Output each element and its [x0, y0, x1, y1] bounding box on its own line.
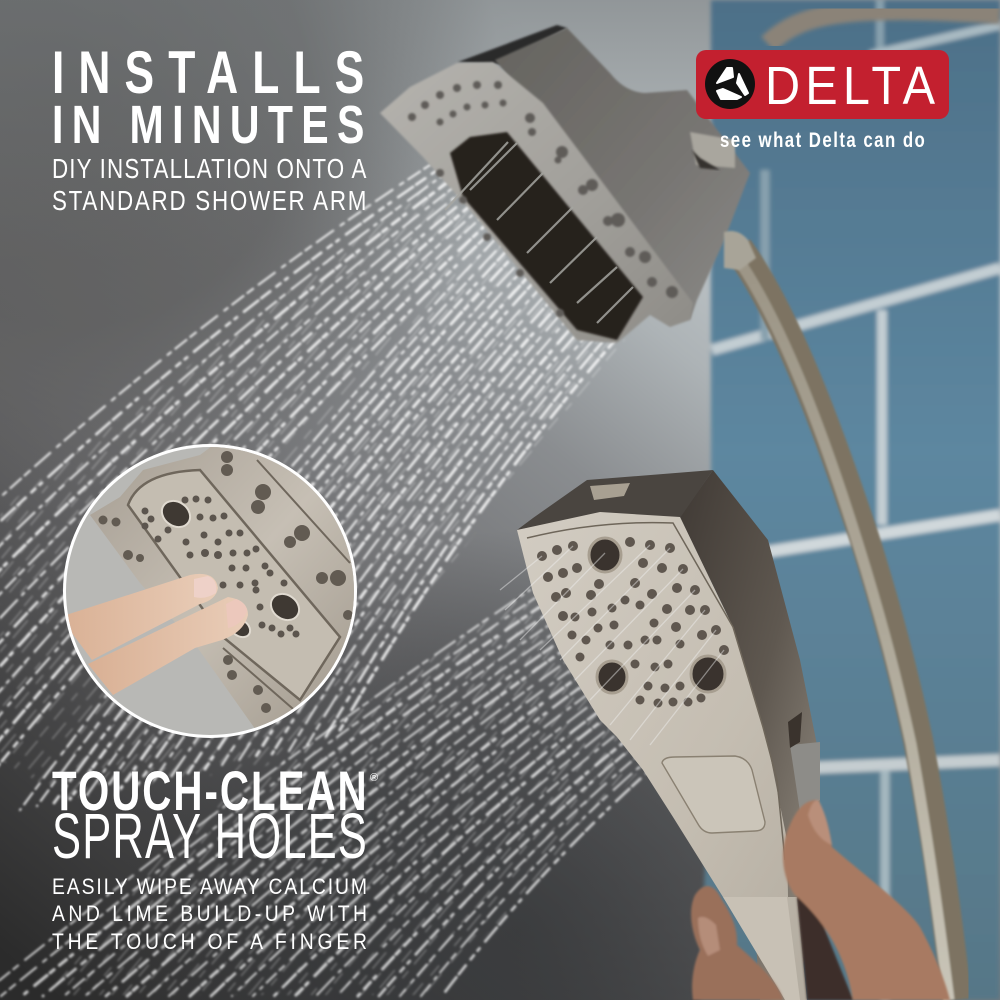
hand shower top button	[590, 483, 630, 500]
head back body	[495, 28, 750, 320]
hand shower inner edge	[527, 523, 785, 860]
inset: nails	[194, 576, 216, 598]
hand holding shower	[691, 800, 950, 1000]
overhead shower head	[380, 25, 756, 343]
headline: touch-clean spray holes: ®	[370, 772, 378, 784]
fingers	[691, 886, 783, 1000]
logo tagline: see what Delta can do	[720, 129, 925, 153]
hand shower water jets	[500, 545, 724, 745]
inset: metal panel	[90, 440, 360, 740]
headline: installs in minutes: STANDARD SHOWER ARM	[52, 186, 366, 217]
shower arm	[768, 10, 1000, 44]
head connector collar	[724, 231, 756, 270]
palm shadow	[797, 897, 853, 1000]
head water jets	[445, 142, 633, 323]
hand shower silver lower side	[790, 742, 820, 812]
headline: touch-clean spray holes: AND LIME BUILD-UP WITH	[52, 902, 367, 926]
inset: edge grooves	[223, 460, 350, 715]
inset: side nozzle clusters	[98, 451, 353, 713]
logo emblem	[705, 59, 755, 109]
thumb nail	[808, 800, 832, 845]
headline: touch-clean spray holes	[52, 761, 378, 954]
hand shower mode panel	[662, 756, 765, 833]
hand shower small nozzles	[537, 537, 729, 708]
Delta logo	[696, 50, 949, 153]
hand shower lower grip	[723, 897, 800, 1000]
head spray face rim	[380, 62, 693, 343]
inset: upper finger	[60, 574, 218, 660]
hand shower side slot	[788, 712, 802, 748]
water spray from hand shower	[0, 590, 650, 996]
background: top shade	[0, 0, 1000, 260]
inset: recessed spray face	[128, 470, 340, 700]
headline: touch-clean spray holes: THE TOUCH OF A FINGER	[52, 930, 367, 954]
background: blue tiles	[700, 0, 1000, 1000]
head dark opening	[450, 132, 643, 340]
head holes	[408, 81, 678, 317]
headline: touch-clean spray holes: TOUCH-CLEAN	[52, 761, 367, 823]
hand shower	[500, 470, 820, 1000]
head top dark sliver	[458, 25, 567, 64]
headline: touch-clean spray holes: SPRAY HOLES	[52, 800, 367, 872]
inset: large nozzles	[161, 500, 300, 638]
headline: installs in minutes: IN MINUTES	[52, 96, 364, 155]
hand shower top body	[517, 470, 713, 530]
inset: small holes	[142, 496, 300, 638]
inset: lower finger	[88, 597, 248, 695]
head connector nut	[690, 132, 735, 168]
hand shower large nozzles	[589, 538, 725, 693]
inset circle: finger wiping spray holes	[60, 440, 360, 740]
headline: touch-clean spray holes: EASILY WIPE AWAY CALCIUM	[52, 875, 367, 899]
hose	[733, 248, 957, 1000]
headline: installs in minutes: INSTALLS	[52, 40, 364, 107]
thumb and palm	[783, 800, 950, 1000]
hand shower side body	[680, 470, 820, 1000]
finger nail	[698, 917, 720, 956]
hand shower face	[517, 512, 807, 1000]
headline: installs in minutes: DIY INSTALLATION ONTO A	[52, 154, 366, 185]
headline: installs in minutes	[52, 40, 366, 217]
logo wordmark: DELTA	[765, 55, 936, 116]
water spray from overhead shower head	[0, 165, 625, 810]
